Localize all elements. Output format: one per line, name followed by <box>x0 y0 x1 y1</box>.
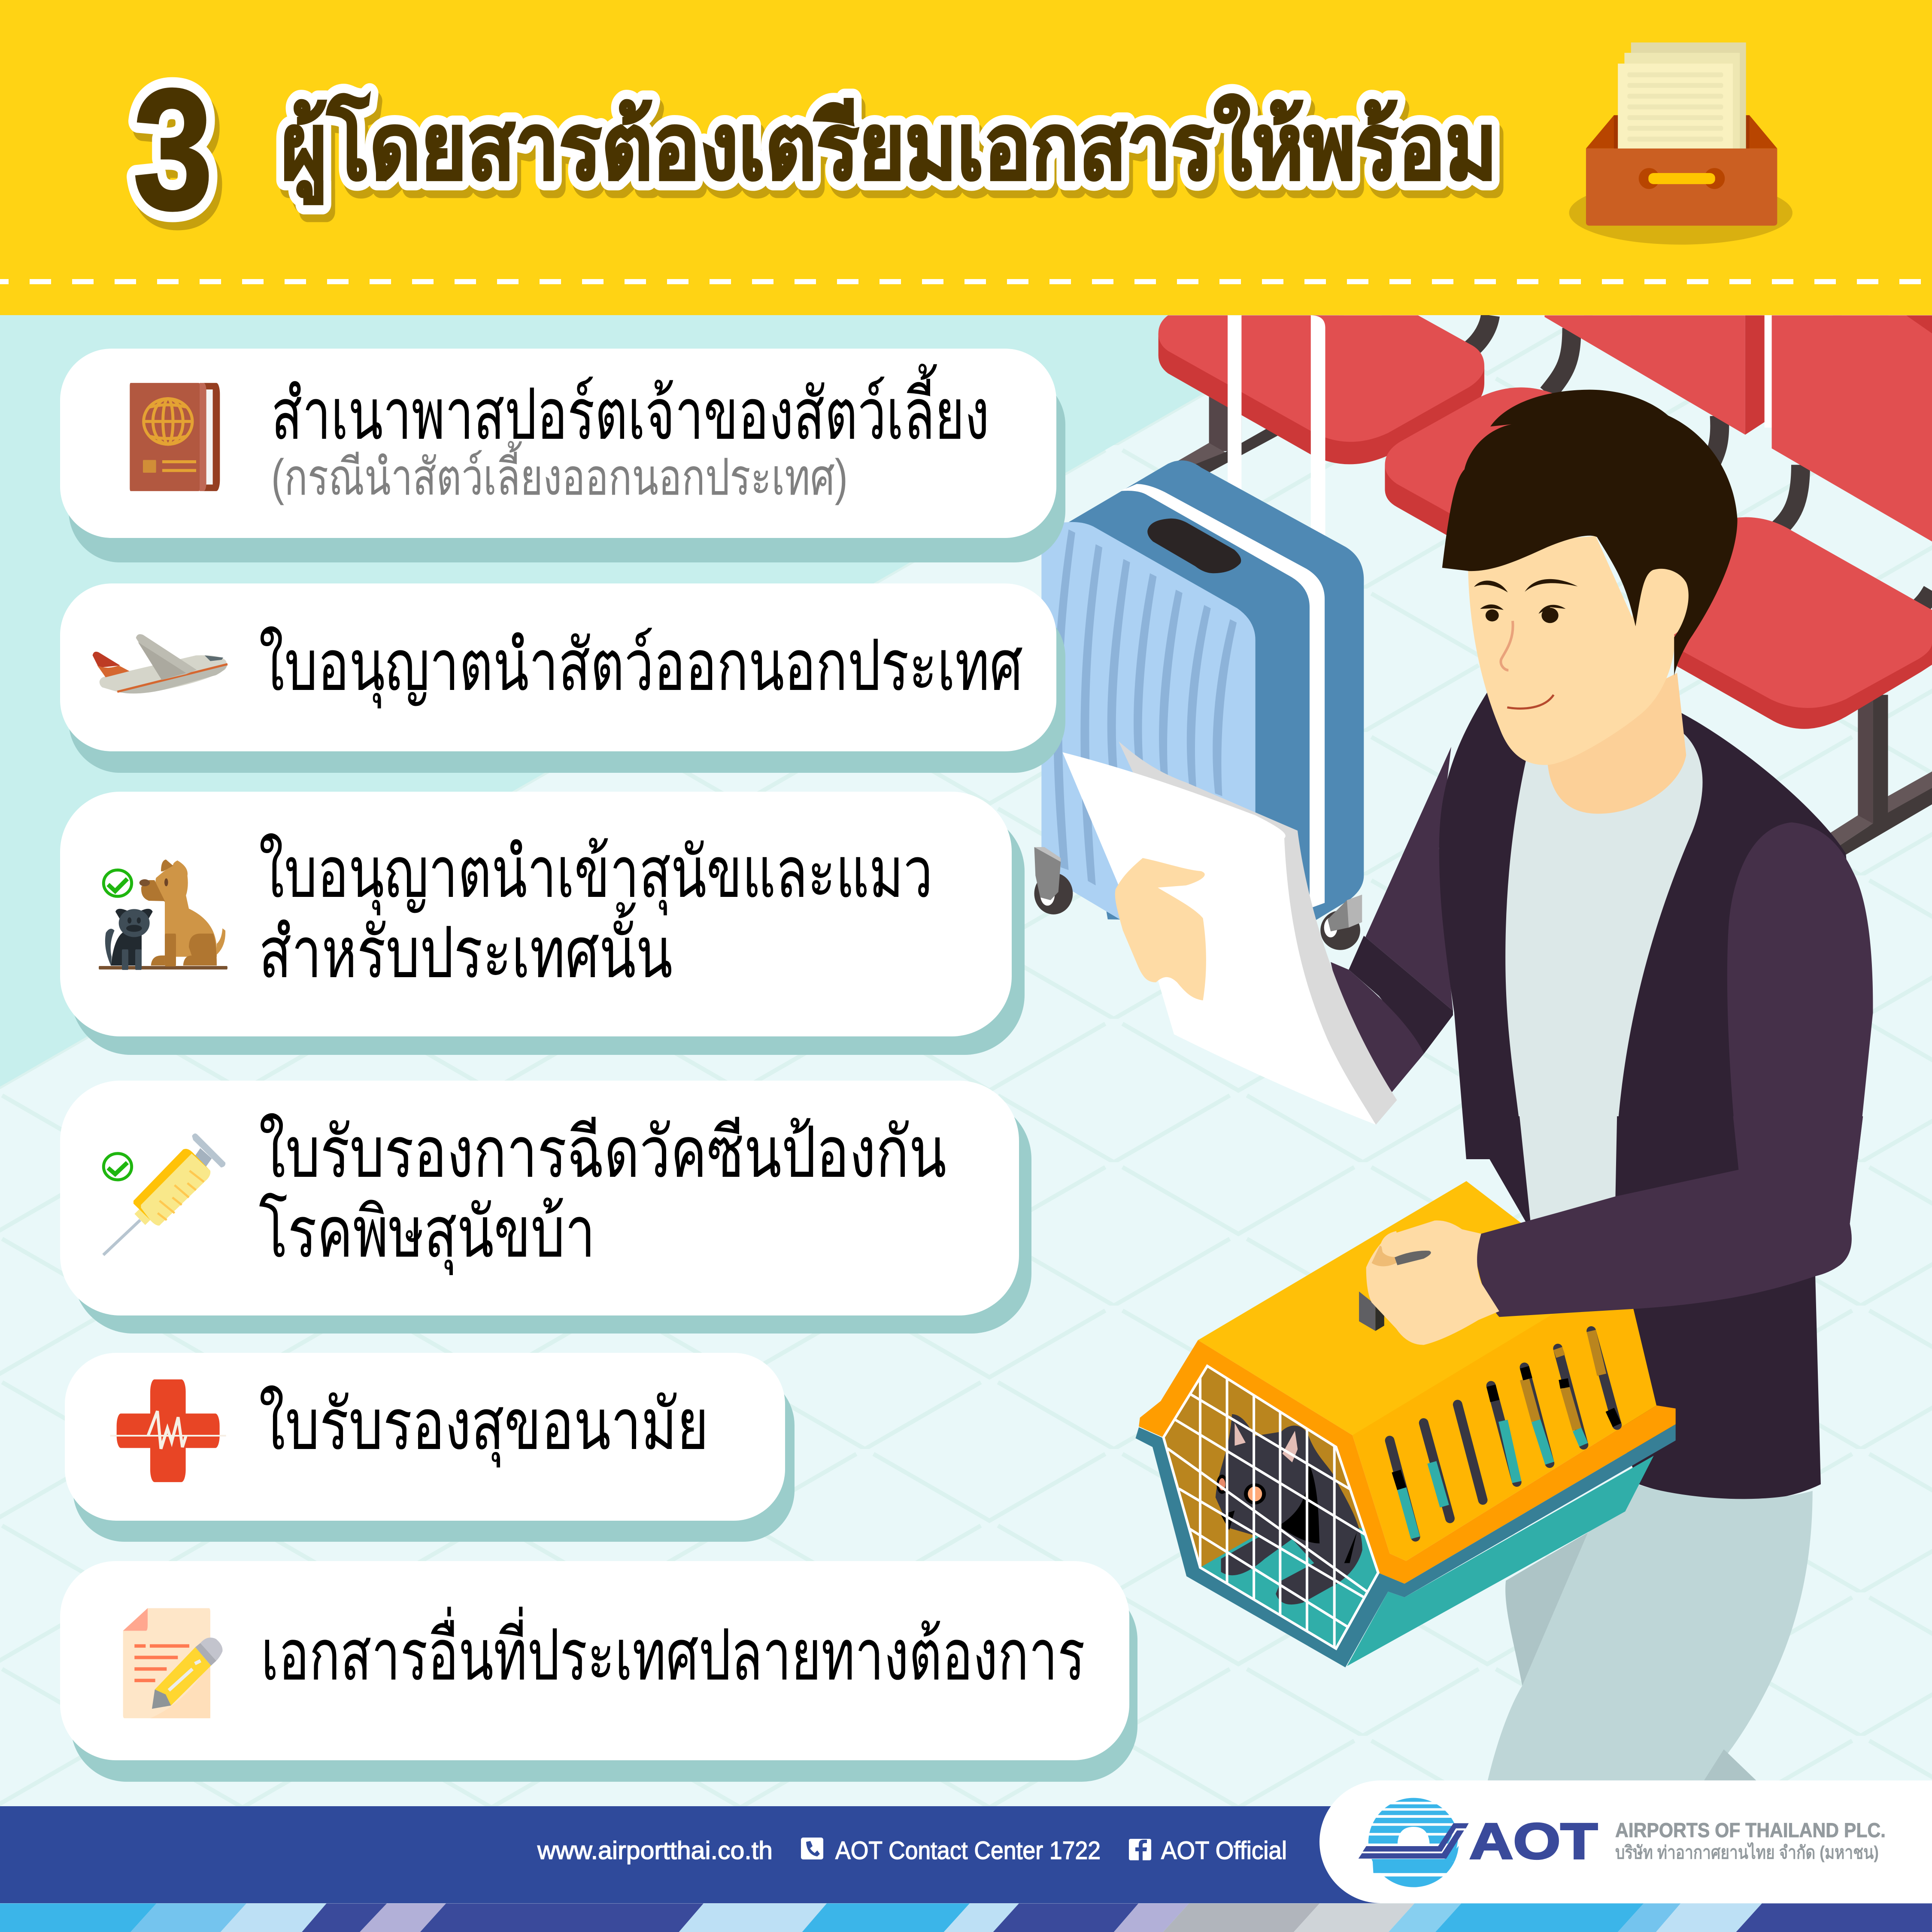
passport note: (กรณีนำสัตว์เลี้ยงออกนอกประเทศ) <box>271 441 848 506</box>
panel: passport owner's copy <box>60 349 1065 562</box>
passport text: สำเนาพาสปอร์ตเจ้าของสัตว์เลี้ยง <box>271 364 989 454</box>
icon: phone <box>801 1838 823 1859</box>
company name English: AIRPORTS OF THAILAND PLC. <box>1615 1819 1886 1841</box>
hand holding document <box>1115 858 1206 1000</box>
header dashed divider <box>0 279 1932 284</box>
wall <box>0 315 1339 1087</box>
footer stripe band <box>0 1903 1932 1932</box>
website: www.airportthai.co.th <box>537 1837 773 1865</box>
icon: document and pencil <box>123 1608 222 1718</box>
heading number 3: 3 <box>138 61 218 253</box>
icon: airplane <box>93 634 227 693</box>
icon: document drawer <box>1569 43 1792 245</box>
company name Thai: บริษัท ท่าอากาศยานไทย จำกัด (มหาชน) <box>1615 1842 1879 1862</box>
icon: AOT globe mark <box>1359 1798 1469 1888</box>
footer bar <box>0 1806 1932 1932</box>
panel: export permit <box>60 583 1065 773</box>
vaccination text line 2: โรคพิษสุนัขบ้า <box>259 1193 595 1276</box>
heading title: ผู้โดยสารต้องเตรียมเอกสารให้พร้อม <box>281 93 1497 204</box>
contact center: AOT Contact Center 1722 <box>835 1837 1101 1865</box>
heading title: ผู้โดยสารต้องเตรียมเอกสารให้พร้อม <box>281 93 1497 204</box>
icon: facebook <box>1129 1839 1151 1860</box>
health certificate text: ใบรับรองสุขอนามัย <box>259 1385 709 1468</box>
illustration: man <box>1331 390 1873 1780</box>
illustration: man's arm and hand on carrier <box>1366 1116 1863 1345</box>
icon: passport <box>130 383 220 491</box>
panel: import permit <box>60 792 1025 1055</box>
import permit text: ใบอนุญาตนำเข้าสุนัขและแมว <box>259 833 933 916</box>
illustration: pet carrier with cat <box>1135 1181 1676 1668</box>
import permit text line 2: สำหรับประเทศนั้น <box>259 902 673 992</box>
facebook name: AOT Official <box>1161 1837 1287 1865</box>
icon: check and syringe <box>103 1133 225 1255</box>
header band <box>0 0 1932 315</box>
other documents text: เอกสารอื่นที่ประเทศปลายทางต้องการ <box>261 1607 1085 1695</box>
illustration: suitcase <box>1034 315 1364 950</box>
export permit text: ใบอนุญาตนำสัตว์ออกนอกประเทศ <box>259 626 1023 709</box>
heading number 3: 3 <box>133 53 213 245</box>
jacket body lower and trousers <box>1465 1116 1863 1780</box>
floor tile pattern <box>0 301 1932 1846</box>
panel: rabies vaccination <box>60 1081 1031 1334</box>
AOT wordmark: AOT <box>1469 1813 1598 1870</box>
icon: check dog and cat <box>99 860 227 970</box>
heading number 3: 3 <box>133 53 213 245</box>
heading title: ผู้โดยสารต้องเตรียมเอกสารให้พร้อม <box>285 101 1501 212</box>
jacket body upper <box>1331 390 1873 1159</box>
panel: other documents <box>60 1561 1137 1782</box>
icon: medical cross <box>110 1379 226 1482</box>
logo panel <box>1319 1780 1932 1903</box>
panel: health certificate <box>65 1353 795 1542</box>
vaccination text: ใบรับรองการฉีดวัคซีนป้องกัน <box>259 1113 946 1192</box>
illustration: document held by man <box>1062 741 1397 1125</box>
illustration: chairs <box>1138 315 1932 855</box>
